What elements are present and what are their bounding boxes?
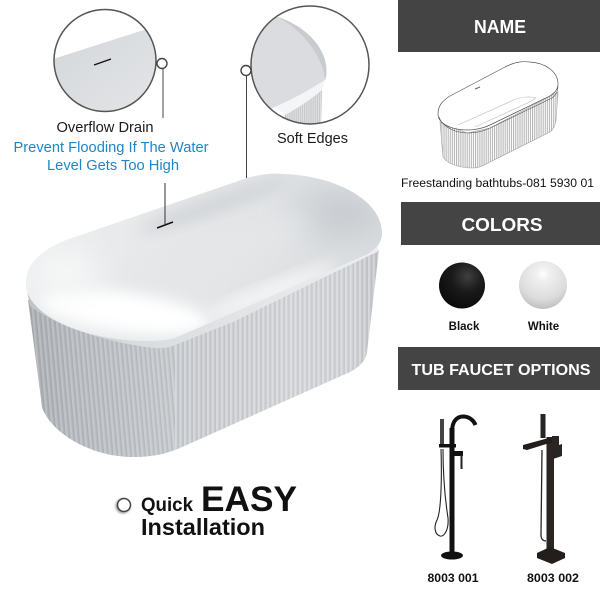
pointer: overflow drain on tub	[157, 183, 173, 228]
tub rim band	[26, 233, 382, 348]
label: overflow drain: Overflow Drain	[56, 120, 154, 136]
marker: soft edges connector	[241, 66, 251, 178]
faucet: 8003 001	[428, 416, 479, 585]
heading: colors: COLORS	[462, 214, 542, 235]
callout: soft edges lens	[241, 5, 370, 178]
marker: overflow drain connector	[157, 58, 167, 118]
text: overflow drain description	[14, 140, 209, 174]
panel: tub faucet options	[398, 347, 600, 585]
label: 8003 001: 8003 001	[428, 571, 479, 585]
swatch: white: White	[528, 321, 559, 333]
tub fluted body	[28, 250, 379, 457]
text: overflow drain description: Level Gets Too High	[47, 158, 179, 174]
badge: quick easy installation	[116, 480, 297, 540]
text: product name: Freestanding bathtubs-081 5930 01	[401, 178, 594, 190]
badge: quick easy installation: EASY	[201, 480, 297, 519]
tub basin top surface	[26, 170, 383, 344]
callout: overflow drain lens	[50, 5, 167, 120]
heading: colors	[401, 202, 600, 245]
panel: name	[398, 0, 600, 190]
badge: quick easy installation: Installation	[141, 514, 265, 540]
faucet: 8003 002	[523, 414, 579, 585]
heading: name: NAME	[474, 17, 526, 37]
swatch: black	[439, 262, 485, 333]
heading: tub faucet options	[398, 347, 600, 390]
heading: name	[398, 0, 600, 52]
label: 8003 002: 8003 002	[527, 571, 579, 585]
bathtub illustration	[20, 170, 385, 465]
text: overflow drain description: Prevent Flooding If The Water	[14, 140, 209, 156]
label: soft edges: Soft Edges	[277, 131, 348, 147]
panel: colors	[401, 202, 600, 333]
badge: quick easy installation: Quick	[141, 495, 193, 516]
heading: tub faucet options: TUB FAUCET OPTIONS	[412, 362, 590, 379]
line drawing of tub	[438, 62, 558, 168]
swatch: white	[519, 261, 567, 333]
swatch: black: Black	[449, 321, 480, 333]
